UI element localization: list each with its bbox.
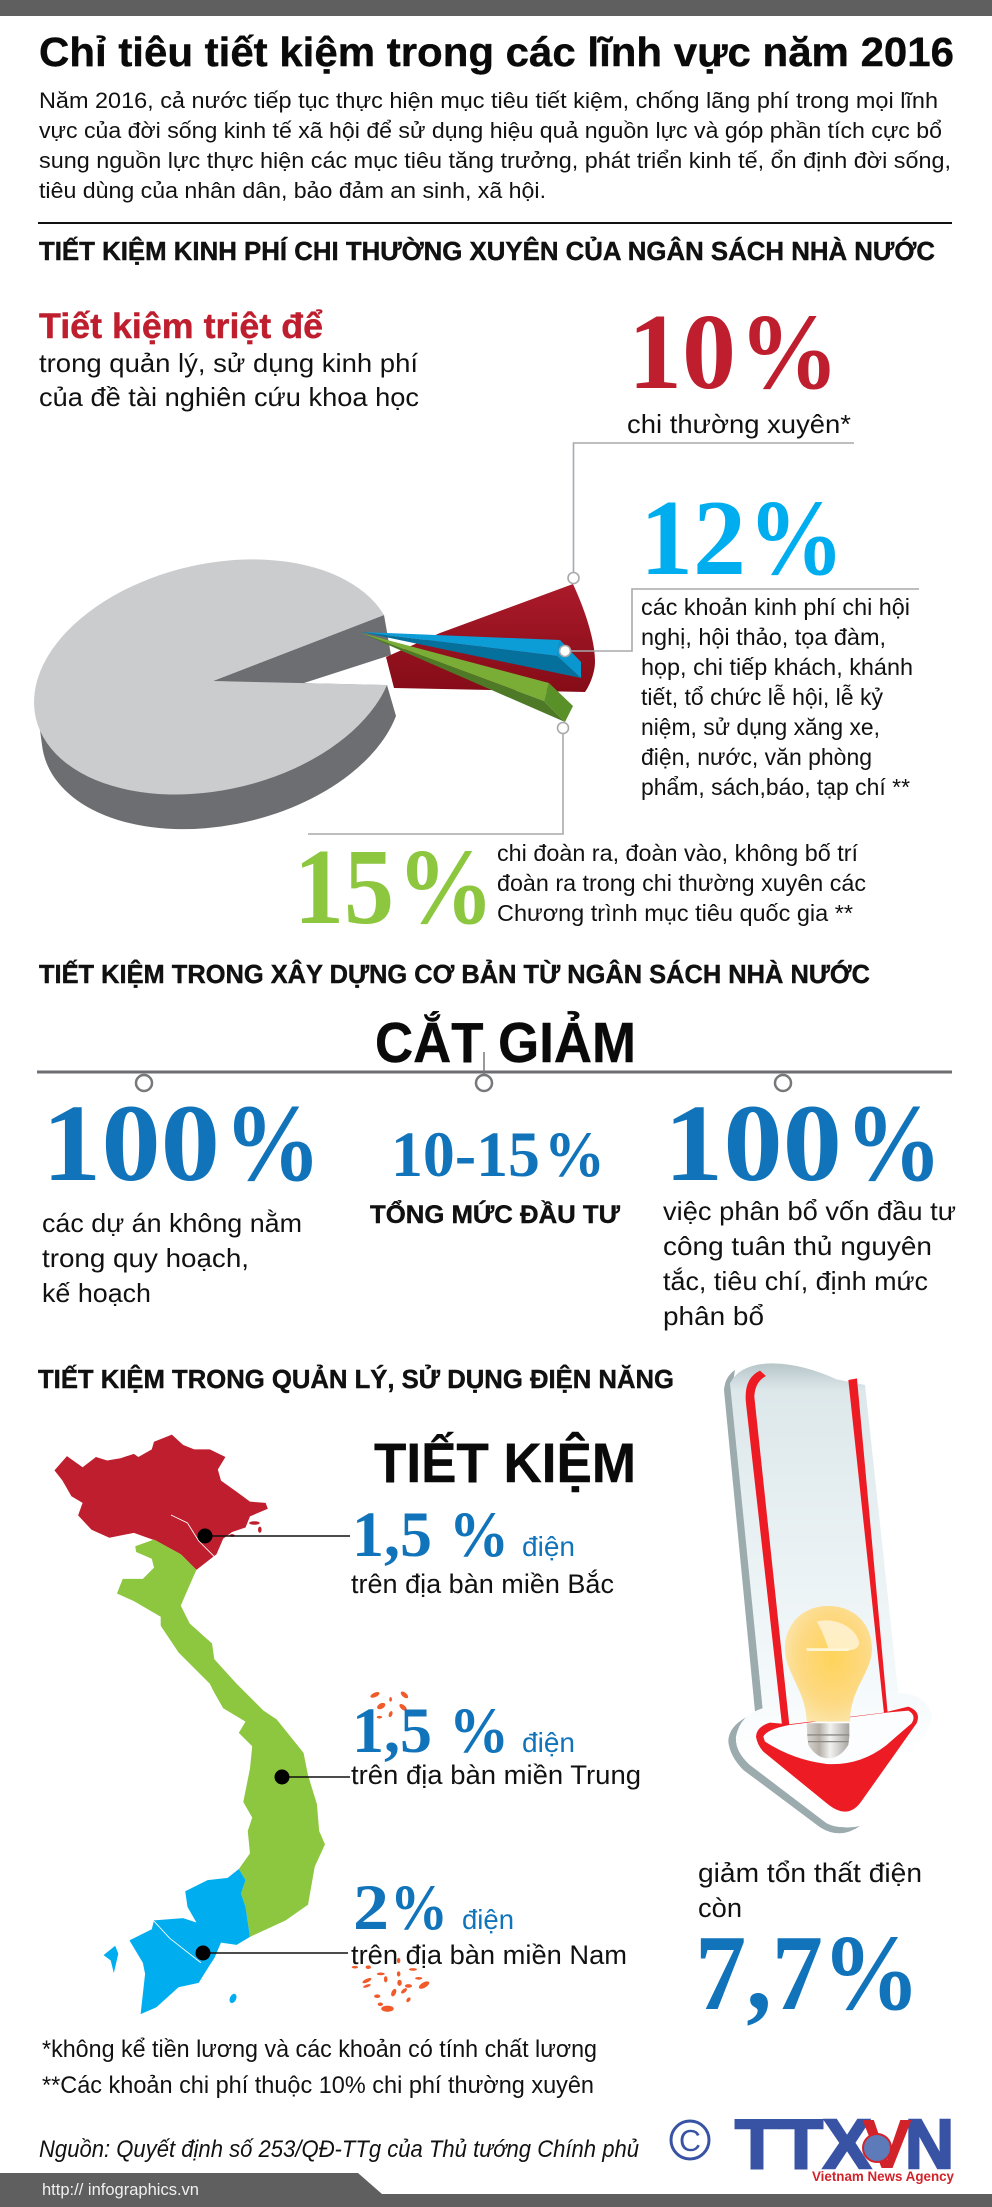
- intro paragraph: vực của đời sống kinh tế xã hội để sử dụng hiệu quả nguồn lực và góp phần tích cực bổ: [39, 118, 942, 143]
- bulb base: [807, 1723, 849, 1758]
- footnotes: [42, 2036, 597, 2099]
- arrow head: [756, 1707, 918, 1812]
- callout: 12 percent: niệm, sử dụng xăng xe,: [641, 714, 880, 740]
- callout: 15 percent: Chương trình mục tiêu quốc gia **: [497, 900, 853, 926]
- stat: 100 percent projects: trong quy hoạch,: [42, 1243, 249, 1273]
- stat: 100 percent allocation: %: [845, 1082, 942, 1204]
- stat: 100 percent allocation: tắc, tiêu chí, định mức: [663, 1266, 928, 1296]
- logo: TTXVN: N: [905, 2105, 954, 2183]
- heading: save: TIẾT KIỆM: [374, 1431, 636, 1494]
- callout: 12 percent: tiết, tổ chức lễ hội, lễ kỷ: [641, 684, 883, 710]
- heading: cut: CẮT GIẢM: [375, 1010, 636, 1075]
- arrow right outline: [848, 1378, 888, 1713]
- base screw threads: [807, 1735, 849, 1742]
- stat: 100 percent allocation: công tuân thủ nguyên: [663, 1231, 932, 1261]
- Hoang Sa islands: [370, 1690, 409, 1719]
- pie notch wall: [213, 615, 391, 684]
- region: north: [54, 1435, 268, 1570]
- stat: central region: 1,5: [352, 1695, 432, 1767]
- callout: 10 percent: chi thường xuyên*: [627, 409, 851, 439]
- stat: 100 percent allocation: phân bổ: [663, 1301, 764, 1331]
- logo: TTXVN: [735, 2105, 954, 2184]
- text block: thorough savings: trong quản lý, sử dụng kinh phí: [39, 348, 419, 378]
- pie side shadow: [36, 681, 396, 829]
- pie top face: [34, 559, 387, 795]
- text: grid loss: giảm tổn thất điện: [698, 1858, 922, 1888]
- arrow left outline: [746, 1371, 789, 1725]
- callout: 10 percent: 10: [628, 293, 736, 412]
- stat: south region: điện: [462, 1904, 514, 1935]
- timeline rule with markers: [37, 1052, 952, 1091]
- footnotes: *không kể tiền lương và các khoản có tính chất lương: [42, 2036, 597, 2063]
- stat: 10-15 percent: TỔNG MỨC ĐẦU TƯ: [370, 1199, 620, 1229]
- text block: thorough savings: của đề tài nghiên cứu khoa học: [39, 382, 419, 412]
- arrow head scoop: [763, 1711, 914, 1764]
- blue slice: [361, 632, 581, 678]
- text: grid loss: 7,7: [695, 1914, 823, 2033]
- leader line: 15 percent: [308, 722, 568, 834]
- text: grid loss: %: [822, 1914, 920, 2033]
- icon: down arrow with light bulb: [724, 1363, 932, 1833]
- stat: central region: %: [449, 1695, 509, 1767]
- stat: 100 percent allocation: việc phân bổ vốn đầu tư: [663, 1196, 956, 1226]
- stat: central region: điện: [522, 1727, 575, 1758]
- icon: copyright: [671, 2121, 709, 2159]
- callout: 15 percent: [294, 828, 866, 947]
- callout: 12 percent: họp, chi tiếp khách, khánh: [641, 654, 913, 680]
- bulb highlight: [817, 1620, 859, 1650]
- callout: 15 percent: chi đoàn ra, đoàn vào, không bố trí: [497, 840, 859, 866]
- callout: 15 percent: %: [397, 828, 494, 947]
- intro paragraph: sung nguồn lực thực hiện các mục tiêu tăng trưởng, phát triển kinh tế, ổn định đời sống,: [39, 148, 951, 173]
- stat: south region: %: [390, 1872, 448, 1944]
- section heading: capital construction: TIẾT KIỆM TRONG XÂY DỰNG CƠ BẢN TỪ NGÂN SÁCH NHÀ NƯỚC: [39, 959, 870, 989]
- logo: TTXVN: V: [862, 2105, 912, 2183]
- section heading: electricity: TIẾT KIỆM TRONG QUẢN LÝ, SỬ DỤNG ĐIỆN NĂNG: [38, 1364, 674, 1394]
- arrow body: [730, 1363, 932, 1827]
- callout: 12 percent: [640, 479, 913, 800]
- callout: 12 percent: điện, nước, văn phòng: [641, 744, 872, 770]
- callout: 12 percent: %: [748, 479, 844, 598]
- stat: 100 percent projects: %: [224, 1082, 321, 1204]
- footnotes: **Các khoản chi phí thuộc 10% chi phí thường xuyên: [42, 2072, 594, 2099]
- stat: south region: trên địa bàn miền Nam: [351, 1940, 627, 1970]
- pie notch gap: [304, 655, 391, 685]
- callout: 15 percent: 15: [294, 828, 394, 947]
- northern islets: [229, 1521, 262, 1537]
- callout: 12 percent: nghị, hội thảo, tọa đàm,: [641, 624, 886, 650]
- stat: 100 percent projects: kế hoạch: [42, 1278, 151, 1308]
- bulb glass: [785, 1606, 872, 1722]
- source: Nguồn: Quyết định số 253/QĐ-TTg của Thủ tướng Chính phủ: [39, 2136, 639, 2163]
- island: Con Dao: [228, 1993, 238, 2004]
- stat: north region: điện: [522, 1531, 575, 1562]
- connector: south: [196, 1946, 348, 1960]
- stat: 100 percent projects: các dự án không nằm: [42, 1208, 302, 1238]
- callout: 12 percent: phẩm, sách,báo, tạp chí **: [641, 774, 910, 800]
- icon: copyright: C: [679, 2123, 701, 2158]
- arrow left shadow strip: [724, 1370, 763, 1712]
- text block: thorough savings: [39, 307, 419, 412]
- Truong Sa islands: [352, 1958, 430, 2012]
- footer bar: http:// infographics.vn: [42, 2180, 199, 2199]
- region: south: [129, 1869, 250, 2014]
- footer bar: [0, 2173, 992, 2207]
- leader line: 12 percent: [560, 589, 919, 656]
- intro paragraph: tiêu dùng của nhân dân, bảo đảm an sinh, xã hội.: [39, 178, 546, 203]
- text: grid loss: còn: [698, 1893, 742, 1923]
- bulb filament: [806, 1648, 849, 1651]
- arrow lower shadow: [728, 1717, 860, 1833]
- section heading: recurrent spending: TIẾT KIỆM KINH PHÍ CHI THƯỜNG XUYÊN CỦA NGÂN SÁCH NHÀ NƯỚC: [39, 236, 935, 266]
- connector: central: [274, 1770, 350, 1784]
- region: central: [117, 1540, 325, 1937]
- stat: 10-15 percent: %: [544, 1119, 605, 1191]
- map of Vietnam: [54, 1435, 430, 2014]
- green slice: [361, 633, 573, 722]
- intro paragraph: Năm 2016, cả nước tiếp tục thực hiện mục tiêu tiết kiệm, chống lãng phí trong mọi lĩnh: [39, 88, 938, 113]
- logo: TTXVN: Vietnam News Agency: [812, 2168, 954, 2184]
- stat: north region: [351, 1499, 614, 1599]
- stat: 100 percent projects: [42, 1082, 321, 1308]
- stat: south region: 2: [353, 1872, 389, 1944]
- callout: 10 percent: [627, 293, 851, 439]
- callout: 12 percent: các khoản kinh phí chi hội: [641, 594, 910, 620]
- leader line: 10 percent: [568, 443, 854, 584]
- pie chart with exploded slices: [34, 559, 595, 829]
- callout: 15 percent: đoàn ra trong chi thường xuyên các: [497, 870, 866, 896]
- callout: 10 percent: %: [739, 293, 839, 412]
- stat: 100 percent projects: 100: [42, 1082, 220, 1204]
- stat: 100 percent allocation: 100: [664, 1082, 842, 1204]
- connector: north: [198, 1528, 350, 1544]
- stat: 10-15 percent: 10-15: [391, 1119, 540, 1191]
- stat: 10-15 percent: [370, 1119, 620, 1229]
- stat: central region: [351, 1695, 641, 1790]
- red slice: [386, 584, 595, 692]
- stat: 100 percent allocation: [663, 1082, 956, 1331]
- stat: north region: trên địa bàn miền Bắc: [351, 1568, 614, 1599]
- stat: north region: 1,5: [352, 1499, 432, 1571]
- stat: south region: [351, 1872, 627, 1970]
- stat: central region: trên địa bàn miền Trung: [351, 1760, 641, 1790]
- text block: thorough savings: Tiết kiệm triệt để: [39, 307, 323, 346]
- island: Phu Quoc: [104, 1946, 118, 1973]
- intro paragraph: [39, 88, 951, 203]
- text: grid loss: [695, 1858, 922, 2033]
- title: Chỉ tiêu tiết kiệm trong các lĩnh vực năm 2016: [39, 29, 954, 75]
- rivers: [154, 1515, 214, 1963]
- callout: 12 percent: 12: [640, 479, 746, 598]
- logo: TTXVN: TTX: [735, 2105, 871, 2183]
- stat: north region: %: [449, 1499, 509, 1571]
